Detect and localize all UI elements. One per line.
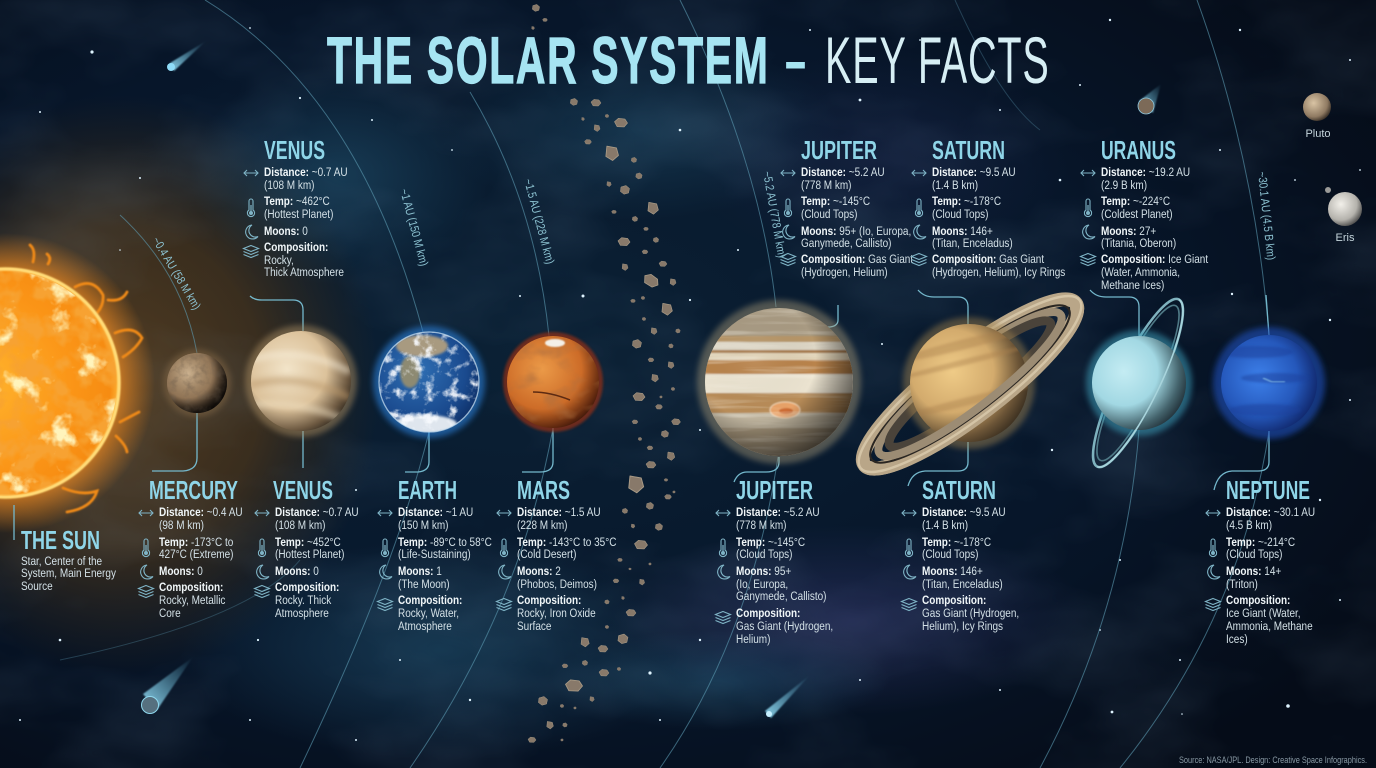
panel: saturn upper: Moons: 146+: [932, 225, 993, 238]
panel: saturn: SATURN: [922, 475, 996, 505]
panel: jupiter: Moons: 95+: [736, 565, 791, 578]
panel: neptune: Composition:: [1226, 594, 1290, 607]
panel: saturn upper: (Hydrogen, Helium), Icy Rings: [932, 266, 1066, 279]
panel: uranus upper: (Coldest Planet): [1101, 208, 1173, 221]
panel: jupiter upper: (Cloud Tops): [801, 208, 858, 221]
panel: jupiter: Temp: ~-145°C: [736, 536, 805, 549]
panel: mars: Rocky, Iron Oxide: [517, 607, 596, 620]
planet: mars: [503, 332, 603, 432]
panel: jupiter: Helium): [736, 633, 771, 646]
orbit distance labels: [149, 170, 1277, 312]
panel: jupiter upper: JUPITER: [801, 135, 877, 165]
panel: jupiter upper: [780, 135, 914, 279]
panel: earth: Atmosphere: [398, 620, 452, 633]
orbit distance labels: ~5.2 AU (778 M km): [760, 170, 788, 259]
panel: earth: (The Moon): [398, 578, 450, 591]
panel: saturn: (Cloud Tops): [922, 548, 979, 561]
planet: uranus: [1083, 298, 1196, 468]
panel: venus: Rocky. Thick: [275, 594, 332, 607]
dwarf planet: pluto: Pluto: [1305, 128, 1331, 140]
panel: the sun: [21, 525, 116, 593]
planet: jupiter: [697, 300, 861, 464]
panel: venus: Temp: ~452°C: [275, 536, 341, 549]
panel: the sun: Source: [21, 580, 53, 593]
panel: neptune: Moons: 14+: [1226, 565, 1281, 578]
panel: mercury: [138, 475, 243, 620]
panel: earth: EARTH: [398, 475, 457, 505]
panel: neptune: [1206, 475, 1315, 646]
panel: jupiter upper: (778 M km): [801, 179, 852, 192]
panel: jupiter: Composition:: [736, 607, 800, 620]
asteroid belt: [528, 4, 680, 742]
planet: mercury: [163, 349, 231, 417]
panel: mercury: Moons: 0: [159, 565, 203, 578]
panel: venus: VENUS: [273, 475, 333, 505]
panel: venus: Atmosphere: [275, 607, 329, 620]
panel: saturn upper: SATURN: [932, 135, 1005, 165]
panel: neptune: (Triton): [1226, 578, 1258, 591]
panel: mars: Distance: ~1.5 AU: [517, 506, 601, 519]
panel: saturn: Composition:: [922, 594, 986, 607]
panel: jupiter upper: (Hydrogen, Helium): [801, 266, 888, 279]
panel: uranus upper: (Water, Ammonia,: [1101, 266, 1180, 279]
panel: neptune: Distance: ~30.1 AU: [1226, 506, 1315, 519]
panel: uranus upper: (Titania, Oberon): [1101, 237, 1176, 250]
panel: earth: (150 M km): [398, 519, 449, 532]
panel: jupiter: [716, 475, 833, 646]
orbit distance labels: ~1.5 AU (228 M km): [521, 177, 556, 266]
panel: the sun: Star, Center of the: [21, 555, 102, 568]
panel: venus: Distance: ~0.7 AU: [275, 506, 359, 519]
panel: mercury: Temp: -173°C to: [159, 536, 233, 549]
panel: saturn upper: Distance: ~9.5 AU: [932, 166, 1016, 179]
panel: saturn: Moons: 146+: [922, 565, 983, 578]
panel: mercury: MERCURY: [149, 475, 238, 505]
panel: venus upper: Temp: ~462°C: [264, 195, 330, 208]
panel: saturn: (1.4 B km): [922, 519, 968, 532]
panel: mars: Temp: -143°C to 35°C: [517, 536, 616, 549]
panel: jupiter: (Io, Europa,: [736, 578, 788, 591]
panel: mars: MARS: [517, 475, 570, 505]
panel: mercury: Composition:: [159, 581, 223, 594]
panel: venus upper: Composition:: [264, 241, 328, 254]
panel: mars: (228 M km): [517, 519, 568, 532]
panel: the sun: System, Main Energy: [21, 567, 116, 580]
panel: mars: (Cold Desert): [517, 548, 577, 561]
panel: neptune: Ices): [1226, 633, 1248, 646]
panel: venus upper: Distance: ~0.7 AU: [264, 166, 348, 179]
panel: venus upper: Thick Atmosphere: [264, 266, 344, 279]
panel: saturn upper: (Cloud Tops): [932, 208, 989, 221]
panel: earth: Distance: ~1 AU: [398, 506, 473, 519]
panel: venus: [254, 475, 359, 620]
panel: mercury: Core: [159, 607, 181, 620]
panel: mercury: 427°C (Extreme): [159, 548, 234, 561]
panel: saturn upper: (Titan, Enceladus): [932, 237, 1013, 250]
panel: neptune: (4.5 B km): [1226, 519, 1272, 532]
panel: venus upper: [244, 135, 348, 279]
planet: neptune: [1213, 327, 1325, 439]
panel: saturn: [902, 475, 1019, 633]
panel: venus upper: Rocky,: [264, 254, 294, 267]
panel: saturn upper: (1.4 B km): [932, 179, 978, 192]
planet: venus: [245, 325, 357, 437]
panel: uranus upper: [1080, 135, 1209, 292]
panel: saturn: (Titan, Enceladus): [922, 578, 1003, 591]
panel: saturn upper: Composition: Gas Giant: [932, 253, 1045, 266]
panel: venus: (Hottest Planet): [275, 548, 345, 561]
panel: mercury: (98 M km): [159, 519, 204, 532]
connector lines: [14, 290, 1269, 540]
panel: saturn: Helium), Icy Rings: [922, 620, 1003, 633]
panel: jupiter: Gas Giant (Hydrogen,: [736, 620, 833, 633]
panel: mercury: Distance: ~0.4 AU: [159, 506, 243, 519]
panel: earth: [378, 475, 492, 633]
panel: neptune: Ice Giant (Water,: [1226, 607, 1301, 620]
planet: the sun: [0, 233, 155, 533]
panel: uranus upper: Composition: Ice Giant: [1101, 253, 1209, 266]
orbit distance labels: ~30.1 AU (4.5 B km): [1255, 171, 1277, 261]
panel: jupiter: JUPITER: [736, 475, 813, 505]
panel: jupiter upper: Composition: Gas Giant: [801, 253, 914, 266]
panel: jupiter upper: Distance: ~5.2 AU: [801, 166, 885, 179]
panel: jupiter: (778 M km): [736, 519, 787, 532]
dwarf planet: eris: Eris: [1336, 232, 1355, 244]
panel: earth: Rocky, Water,: [398, 607, 459, 620]
panel: earth: Composition:: [398, 594, 462, 607]
panel: jupiter upper: Moons: 95+ (Io, Europa,: [801, 225, 911, 238]
panel: earth: Moons: 1: [398, 565, 442, 578]
panel: mars: Moons: 2: [517, 565, 561, 578]
panel: neptune: Temp: ~-214°C: [1226, 536, 1295, 549]
panel: venus: Moons: 0: [275, 565, 319, 578]
panel: saturn upper: [912, 135, 1066, 279]
panel: neptune: NEPTUNE: [1226, 475, 1310, 505]
panel: venus upper: VENUS: [264, 135, 325, 165]
panel: neptune: Ammonia, Methane: [1226, 620, 1313, 633]
panel: mercury: Rocky, Metallic: [159, 594, 226, 607]
panel: jupiter: Distance: ~5.2 AU: [736, 506, 820, 519]
panel: venus: (108 M km): [275, 519, 326, 532]
panel: saturn: Gas Giant (Hydrogen,: [922, 607, 1019, 620]
panel: saturn: Distance: ~9.5 AU: [922, 506, 1006, 519]
panel: earth: Temp: -89°C to 58°C: [398, 536, 492, 549]
panel: jupiter: Ganymede, Callisto): [736, 590, 827, 603]
panel: mars: Composition:: [517, 594, 581, 607]
panel: venus upper: (Hottest Planet): [264, 208, 334, 221]
planet: saturn: [856, 292, 1084, 476]
orbit distance labels: ~0.4 AU (58 M km): [149, 235, 203, 312]
dwarf planet: eris: [1325, 187, 1362, 244]
panel: uranus upper: Moons: 27+: [1101, 225, 1156, 238]
panel: jupiter upper: Temp: ~-145°C: [801, 195, 870, 208]
panel: mars: [496, 475, 616, 633]
dwarf planet: pluto: [1303, 93, 1331, 140]
panel: uranus upper: Temp: ~-224°C: [1101, 195, 1170, 208]
planet: earth: [373, 326, 485, 438]
orbit distance labels: ~1 AU (150 M km): [397, 187, 430, 268]
panel: venus: Composition:: [275, 581, 339, 594]
panel: uranus upper: Methane Ices): [1101, 279, 1165, 292]
title: KEY FACTS: [825, 24, 1049, 98]
comets: [142, 41, 1161, 718]
panel: uranus upper: Distance: ~19.2 AU: [1101, 166, 1190, 179]
panel: saturn upper: Temp: ~-178°C: [932, 195, 1001, 208]
title: THE SOLAR SYSTEM: [327, 23, 768, 97]
panel: neptune: (Cloud Tops): [1226, 548, 1283, 561]
panel: uranus upper: (2.9 B km): [1101, 179, 1147, 192]
panel: mars: (Phobos, Deimos): [517, 578, 597, 591]
panel: jupiter upper: Ganymede, Callisto): [801, 237, 892, 250]
title: [327, 23, 1049, 98]
panel: venus upper: Moons: 0: [264, 225, 308, 238]
panel: earth: (Life-Sustaining): [398, 548, 471, 561]
panel: venus upper: (108 M km): [264, 179, 315, 192]
title: –: [785, 23, 806, 97]
panel: mars: Surface: [517, 620, 551, 633]
panel: saturn: Temp: ~-178°C: [922, 536, 991, 549]
panel: uranus upper: URANUS: [1101, 135, 1176, 165]
panel: the sun: THE SUN: [21, 525, 100, 555]
panel: jupiter: (Cloud Tops): [736, 548, 793, 561]
